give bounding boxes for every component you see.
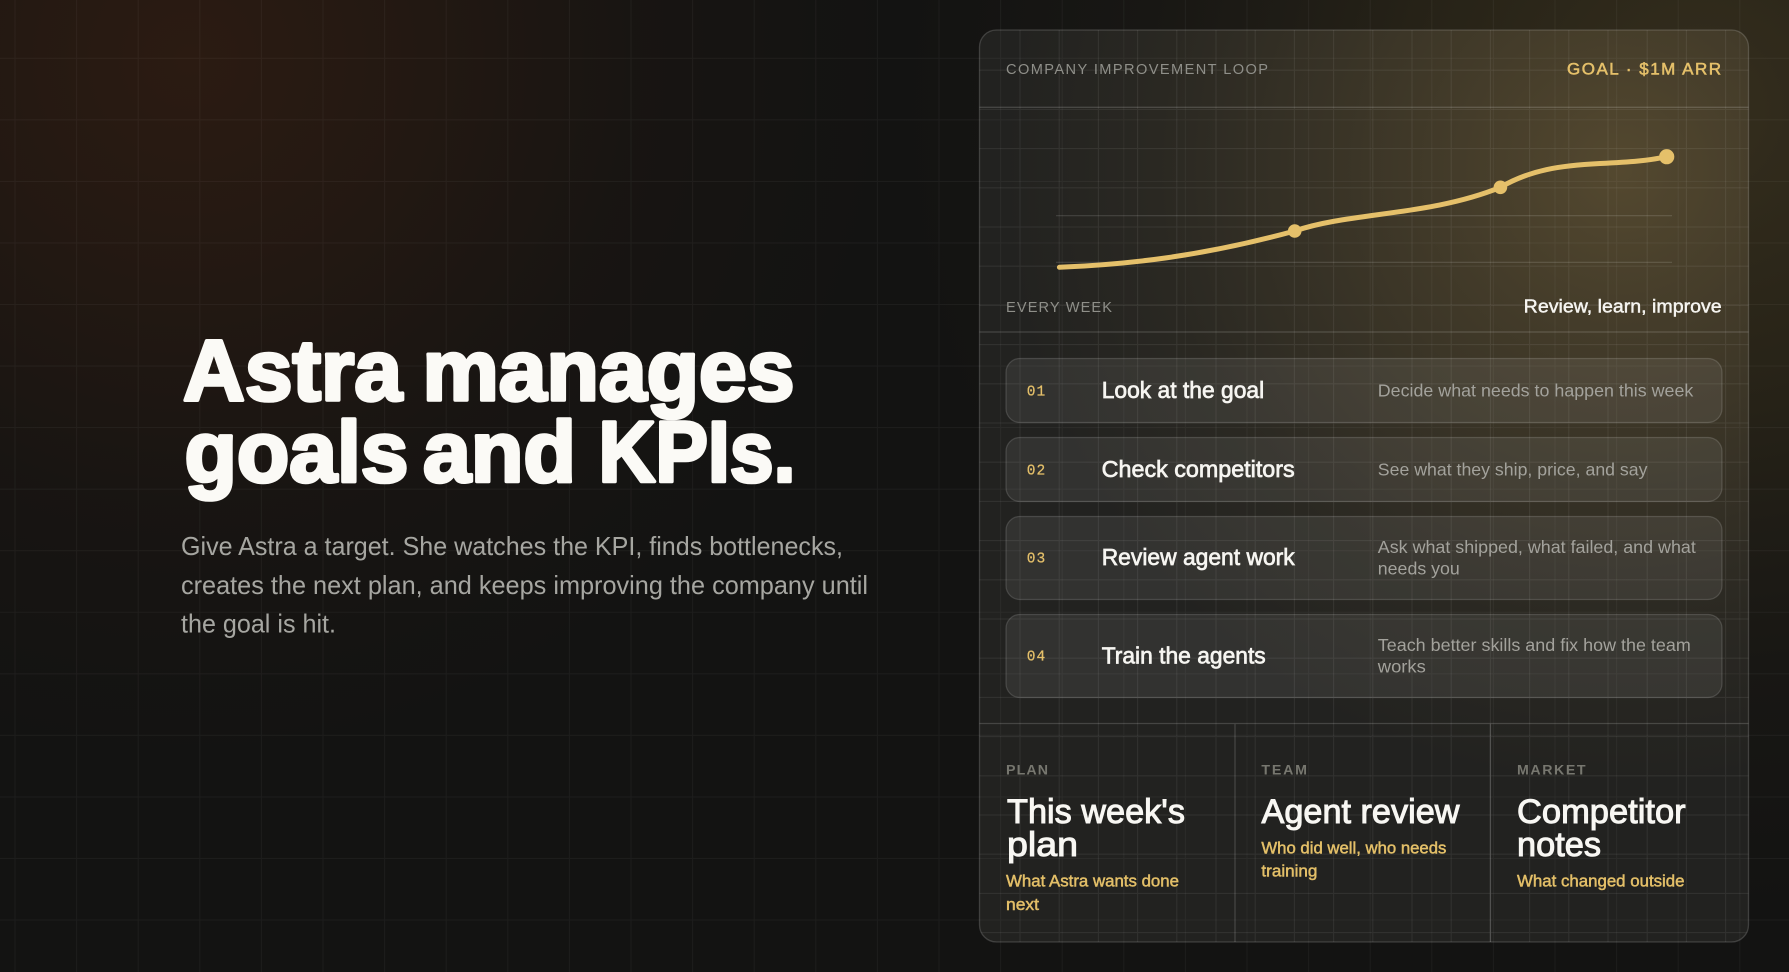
card header: title and goal: GOAL · $1M ARR bbox=[1567, 59, 1721, 78]
column: plan: What Astra wants done bbox=[1006, 872, 1179, 891]
heading: Astra manages goals and KPIs: manages bbox=[422, 323, 794, 419]
heading: Astra manages goals and KPIs: goals bbox=[184, 404, 408, 500]
step 03 row: needs you bbox=[1378, 558, 1460, 578]
heading: Astra manages goals and KPIs: Astra bbox=[183, 323, 403, 419]
line chart: progress toward goal bbox=[1056, 149, 1674, 267]
step 01 row: Look at the goal bbox=[1102, 377, 1264, 403]
step 03 row bbox=[1006, 516, 1722, 600]
heading: Astra manages goals and KPIs: and bbox=[423, 404, 576, 500]
step 04 row: Train the agents bbox=[1102, 642, 1266, 668]
chart footer labels bbox=[1006, 296, 1722, 317]
step 03 row: Review agent work bbox=[1102, 544, 1295, 570]
card header: title and goal: COMPANY IMPROVEMENT LOOP bbox=[1006, 62, 1268, 78]
text block: intro paragraph: Give Astra a target. She watches the KPI, finds bottlenecks, bbox=[181, 531, 843, 561]
column: market bbox=[1517, 762, 1686, 891]
text block: intro paragraph bbox=[181, 531, 868, 639]
column: plan bbox=[1006, 762, 1185, 914]
column: market: MARKET bbox=[1517, 762, 1586, 778]
column: team: TEAM bbox=[1261, 762, 1307, 778]
text block: intro paragraph: creates the next plan, and keeps improving the company until bbox=[181, 570, 868, 600]
step 02 row bbox=[1006, 438, 1722, 502]
column: team: training bbox=[1261, 861, 1317, 880]
step 01 row: 01 bbox=[1027, 384, 1045, 400]
step 04 row: 04 bbox=[1027, 649, 1045, 665]
heading: Astra manages goals and KPIs: KPIs. bbox=[598, 404, 796, 500]
step 02 row: Check competitors bbox=[1102, 456, 1295, 482]
card header: title and goal bbox=[1006, 59, 1721, 78]
panel: company improvement loop card background bbox=[980, 30, 1748, 942]
step 01 row: Decide what needs to happen this week bbox=[1378, 380, 1694, 400]
column: team bbox=[1261, 762, 1460, 880]
chart footer labels: EVERY WEEK bbox=[1006, 300, 1112, 316]
heading: Astra manages goals and KPIs bbox=[183, 323, 796, 500]
chart footer labels: Review, learn, improve bbox=[1524, 296, 1722, 317]
column: team: Who did well, who needs bbox=[1261, 838, 1446, 857]
step 03 row: Ask what shipped, what failed, and what bbox=[1378, 537, 1696, 557]
column: team: Agent review bbox=[1262, 793, 1460, 831]
step 04 row bbox=[1006, 614, 1722, 698]
column: market: Competitor bbox=[1517, 793, 1686, 831]
step 04 row: works bbox=[1377, 656, 1426, 676]
column: plan: next bbox=[1006, 895, 1039, 914]
column: plan: plan bbox=[1007, 826, 1078, 864]
step 04 row: Teach better skills and fix how the team bbox=[1378, 635, 1691, 655]
step 03 row: 03 bbox=[1027, 551, 1045, 567]
step 02 row: See what they ship, price, and say bbox=[1378, 459, 1648, 479]
column: market: notes bbox=[1517, 826, 1601, 864]
column: market: What changed outside bbox=[1517, 872, 1684, 891]
column: plan: PLAN bbox=[1006, 762, 1048, 778]
column: plan: This week's bbox=[1007, 793, 1185, 831]
text block: intro paragraph: the goal is hit. bbox=[181, 609, 336, 639]
step 02 row: 02 bbox=[1027, 463, 1045, 479]
step 01 row bbox=[1006, 358, 1722, 422]
